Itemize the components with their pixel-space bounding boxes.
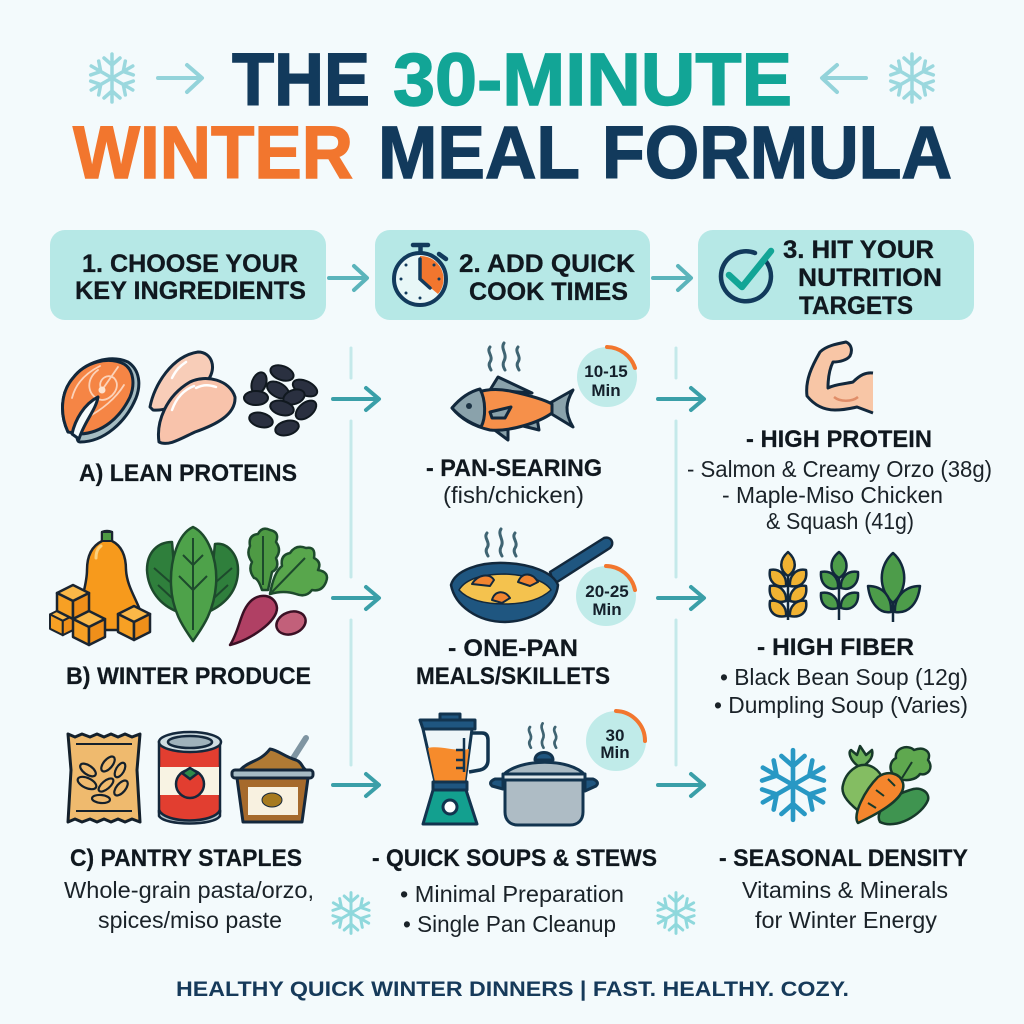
header: step 3: NUTRITION — [798, 264, 942, 292]
icon: timer badge 10-15 min: 10-15 — [584, 362, 628, 381]
label: quick soups and stews: - QUICK SOUPS & STEWS — [372, 845, 657, 872]
icon: lower snowflake right — [655, 893, 697, 933]
label: quick soups and stews — [372, 845, 657, 937]
label: pan-searing: (fish/chicken) — [443, 482, 584, 508]
header: step 3: TARGETS — [799, 292, 913, 320]
icon: spinach — [147, 527, 238, 641]
icon: title snowflake left — [87, 54, 137, 102]
icon: title snowflake right — [887, 54, 937, 102]
header: step 1: KEY INGREDIENTS — [75, 277, 306, 305]
icon: soup pot with steam — [491, 723, 597, 825]
icon: stopwatch — [394, 245, 446, 305]
label: one-pan meals: MEALS/SKILLETS — [416, 663, 610, 690]
text: protein details — [687, 456, 992, 534]
text: soups details: • Single Pan Cleanup — [403, 911, 616, 937]
text: pantry details: Whole-grain pasta/orzo, — [64, 877, 314, 903]
label: pan-searing: - PAN-SEARING — [426, 455, 602, 482]
label: lean proteins: A) LEAN PROTEINS — [79, 460, 297, 487]
icon: tomato can — [159, 732, 221, 824]
icon: timer badge 20-25 min — [576, 566, 636, 626]
flow arrows — [333, 388, 704, 796]
text: seasonal details — [742, 877, 948, 933]
text: pantry details — [64, 877, 314, 933]
header: step 1 — [50, 230, 326, 320]
label: pantry staples: C) PANTRY STAPLES — [70, 845, 302, 872]
text: soups details — [400, 881, 624, 937]
icon: timer badge 10-15 min — [577, 347, 637, 407]
header: step 2 — [375, 230, 650, 320]
icon: timer badge 30 min: 30 — [606, 726, 624, 745]
icon: timer badge 30 min: Min — [600, 743, 630, 762]
icon: lower snowflake left — [330, 893, 372, 933]
arrow: step 1 to 2 — [329, 266, 367, 290]
label: seasonal density — [719, 845, 968, 933]
icon: big snowflake — [757, 750, 829, 820]
icon: chicken breasts — [150, 352, 235, 443]
label: high fiber — [714, 634, 968, 718]
text: pantry details: spices/miso paste — [98, 907, 282, 933]
icon: whole grain pasta bag — [68, 734, 140, 822]
text: fiber details: • Dumpling Soup (Varies) — [714, 692, 968, 718]
icon: wheat sprig — [770, 552, 806, 620]
icon: timer badge 10-15 min: Min — [591, 381, 621, 400]
header: step 2: 2. ADD QUICK — [459, 250, 635, 278]
icon: timer badge 20-25 min: Min — [592, 600, 622, 619]
icon: timer badge 30 min — [586, 711, 646, 771]
label: high fiber: - HIGH FIBER — [757, 634, 914, 661]
header: step 1: 1. CHOOSE YOUR — [82, 250, 298, 278]
title — [73, 38, 952, 194]
header: step 3 — [698, 230, 974, 320]
label: one-pan meals — [416, 635, 610, 690]
text: protein details: - Maple-Miso Chicken — [722, 482, 943, 508]
icon: beets — [230, 529, 327, 645]
icon: fish with steam — [452, 343, 573, 440]
title: MEAL — [378, 111, 580, 194]
label: seasonal density: - SEASONAL DENSITY — [719, 845, 968, 872]
label: pantry staples — [64, 845, 314, 933]
label: one-pan meals: - ONE-PAN — [448, 635, 578, 662]
text: seasonal details: for Winter Energy — [755, 907, 938, 933]
text: protein details: & Squash (41g) — [766, 508, 914, 534]
header: step 3: 3. HIT YOUR — [783, 236, 934, 264]
arrow: step 2 to 3 — [653, 266, 691, 290]
text: protein details: - Salmon & Creamy Orzo (38g) — [687, 456, 992, 482]
title: THE — [232, 38, 370, 121]
arrow: title left — [158, 65, 202, 92]
icon: flexed arm — [807, 342, 873, 413]
label: pan-searing — [426, 455, 602, 508]
icon: miso paste tub — [232, 738, 313, 822]
text: soups details: • Minimal Preparation — [400, 881, 624, 907]
title: WINTER — [73, 111, 353, 194]
label: high protein — [687, 426, 992, 534]
icon: herb sprig — [821, 552, 858, 620]
icon: check circle — [721, 251, 771, 301]
icon: winter vegetables — [842, 746, 930, 824]
icon: butternut squash and cubes — [50, 531, 150, 645]
icon: black beans — [244, 362, 320, 438]
icon: salmon steak — [63, 359, 139, 442]
icon: leaf sprig — [868, 553, 920, 622]
text: fiber details: • Black Bean Soup (12g) — [720, 664, 968, 690]
footer: HEALTHY QUICK WINTER DINNERS | FAST. HEALTHY. COZY. — [176, 978, 849, 1001]
arrow: title right — [822, 65, 866, 92]
icon: timer badge 20-25 min: 20-25 — [585, 582, 629, 601]
text: seasonal details: Vitamins & Minerals — [742, 877, 948, 903]
label: winter produce: B) WINTER PRODUCE — [66, 663, 311, 690]
icon: blender — [420, 714, 488, 824]
title: 30-MINUTE — [393, 38, 792, 121]
header: step 2: COOK TIMES — [469, 278, 628, 306]
column dividers — [351, 348, 676, 765]
title: FORMULA — [602, 111, 952, 194]
text: fiber details — [714, 664, 968, 718]
icon: skillet with steam — [451, 529, 612, 622]
label: high protein: - HIGH PROTEIN — [746, 426, 932, 453]
